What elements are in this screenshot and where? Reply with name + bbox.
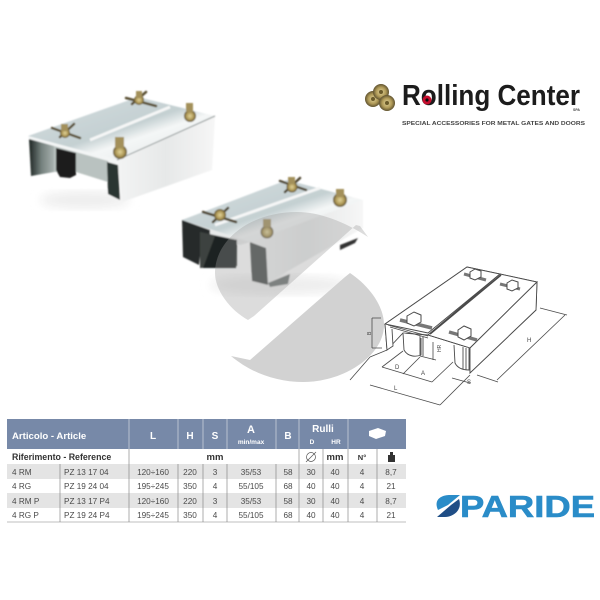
drawing: dimension labels: HR	[437, 344, 443, 352]
table row: 4 RM P: 4	[360, 497, 365, 506]
table header band: Rulli	[312, 424, 334, 435]
Paride S icon	[437, 495, 460, 517]
drawing: dimension labels: B	[367, 331, 373, 335]
table row: 4 RG: PZ 19 24 04	[64, 482, 109, 491]
drawing: dimension labels: D	[395, 365, 400, 371]
logo icon: gold nuts	[365, 84, 395, 111]
table row: 4 RM P: 8,7	[385, 497, 397, 506]
table row: 4 RG: 40	[330, 482, 340, 491]
logo wordmark: Rolling Center	[402, 80, 580, 112]
table row: 4 RM P	[12, 497, 397, 506]
table row: 4 RM: 4	[360, 468, 365, 477]
table header band: A	[247, 424, 255, 436]
table row stripes	[7, 449, 406, 522]
table row: 4 RG: 4	[213, 482, 218, 491]
table row: 4 RM: 3	[213, 468, 218, 477]
drawing: dimension labels	[367, 331, 531, 392]
table row: 4 RM P: 3	[213, 497, 218, 506]
specifications table	[7, 419, 406, 522]
table row: 4 RG P: 350	[183, 511, 197, 520]
table row: 4 RG P: 195÷245	[137, 511, 169, 520]
icon: box	[369, 428, 386, 439]
table header band: B	[284, 431, 292, 442]
drawing: dimension lines	[350, 308, 567, 405]
logo: Rolling Center	[365, 80, 586, 127]
logo red dot	[422, 96, 432, 104]
table row: 4 RG P: 4 RG P	[12, 511, 39, 520]
technical drawing of bracket	[350, 267, 567, 405]
table row: 4 RG: 195÷245	[137, 482, 169, 491]
table sub-header row	[12, 452, 395, 463]
table header band: HR	[331, 439, 341, 446]
table row: 4 RM P: 4 RM P	[12, 497, 40, 506]
table row: 4 RM P: PZ 13 17 P4	[64, 497, 110, 506]
table row: 4 RM P: 120÷160	[137, 497, 169, 506]
watermark: solid lower half disc	[231, 273, 384, 382]
drawing: dimension labels: A	[421, 371, 425, 377]
table row: 4 RG: 40	[306, 482, 316, 491]
table header band: min/max	[238, 439, 265, 446]
table row: 4 RM: 30	[306, 468, 316, 477]
table row: 4 RM P: 220	[183, 497, 197, 506]
table sub-header row: mm	[207, 452, 223, 463]
table row: 4 RM: 220	[183, 468, 197, 477]
table header band: H	[186, 431, 194, 442]
table header band: S	[212, 431, 219, 442]
table row: 4 RG P: 21	[386, 511, 396, 520]
table row: 4 RG P: 40	[330, 511, 340, 520]
table row: 4 RM: 35/53	[241, 468, 262, 477]
table row: 4 RG: 4 RG	[12, 482, 31, 491]
table row: 4 RM	[12, 468, 397, 477]
table row: 4 RG P: 68	[283, 511, 293, 520]
table row: 4 RM: 120÷160	[137, 468, 169, 477]
product photo: second roller bracket	[182, 177, 363, 295]
drawing: dimension labels: S	[467, 380, 471, 386]
table row: 4 RG P: PZ 19 24 P4	[64, 511, 110, 520]
table header band: Articolo - Article	[12, 431, 86, 442]
table row: 4 RG P: 4	[360, 511, 365, 520]
logo: Paride	[437, 489, 595, 524]
table row: 4 RG	[12, 482, 396, 491]
table row: 4 RG P	[12, 511, 396, 520]
icon: weight	[388, 452, 395, 462]
table header band: D	[310, 439, 315, 446]
table row: 4 RM P: 58	[283, 497, 293, 506]
table sub-header row: N°	[358, 453, 366, 462]
table sub-header row: Riferimento - Reference	[12, 452, 111, 462]
table row: 4 RM: PZ 13 17 04	[64, 468, 109, 477]
drawing: bracket outline	[385, 267, 537, 373]
table sub-header row: mm	[327, 452, 343, 463]
table header band	[7, 419, 406, 449]
table row: 4 RM P: 40	[330, 497, 340, 506]
drawing: mounting bolts	[400, 269, 520, 340]
table row: 4 RG: 350	[183, 482, 197, 491]
table row: 4 RG: 68	[283, 482, 293, 491]
table row: 4 RM: 4 RM	[12, 468, 32, 477]
product photo: large roller bracket	[28, 91, 215, 209]
logo SPA mark: SPA	[573, 108, 580, 112]
table row: 4 RM: 58	[283, 468, 293, 477]
table row: 4 RM: 8,7	[385, 468, 397, 477]
logo tagline: SPECIAL ACCESSORIES FOR METAL GATES AND DOORS	[402, 121, 586, 127]
Paride wordmark: PARIDE	[460, 489, 595, 524]
table row: 4 RG P: 55/105	[238, 511, 264, 520]
table row: 4 RM P: 30	[306, 497, 316, 506]
watermark: translucent upper half disc	[215, 212, 368, 320]
table row: 4 RM P: 35/53	[241, 497, 262, 506]
table row: 4 RG: 55/105	[238, 482, 264, 491]
table row: 4 RG P: 4	[213, 511, 218, 520]
table row: 4 RG P: 40	[306, 511, 316, 520]
table row: 4 RG: 4	[360, 482, 365, 491]
drawing: dimension labels: L	[394, 386, 398, 392]
table row: 4 RM: 40	[330, 468, 340, 477]
table header band: L	[150, 431, 156, 442]
drawing: dimension labels: H	[527, 338, 531, 344]
table row: 4 RG: 21	[386, 482, 396, 491]
